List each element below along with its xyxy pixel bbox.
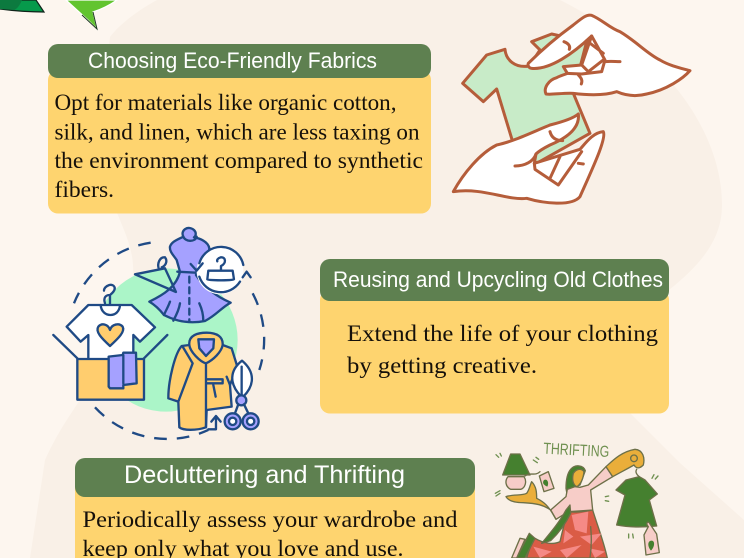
hanger refresh circle [191,247,251,294]
green shirt on hanger with tag [616,469,659,555]
lamp with tag [503,454,554,492]
woman figure [506,449,644,558]
text block: reusing description: Extend the life of your clothing [347,321,659,346]
text block: reusing description [347,321,659,378]
text block: decluttering description: Periodically assess your wardrobe and [82,507,458,532]
text block: fabrics description: silk, and linen, which are less taxing on [54,120,420,144]
text block: fabrics description: the environment compared to synthetic [54,148,423,173]
t-shirt and box [53,285,167,400]
illustration: thrifting woman [495,441,659,558]
illustration: reuse and upcycle clothes [53,228,264,439]
text block: reusing description: by getting creative. [347,353,537,378]
text block: fabrics description: Opt for materials like organic cotton, [54,90,396,115]
panel: decluttering and thrifting [75,458,475,558]
green circle [94,268,238,412]
coat [168,333,237,430]
motion marks [495,453,658,538]
decorative leaves [0,0,117,29]
illustration: hands holding a green t-shirt [453,15,690,203]
panel: reusing and upcycling old clothes [320,259,669,414]
label: thrifting lettering: THRIFTING [543,441,610,461]
heading: reusing and upcycling: Reusing and Upcycling Old Clothes [333,267,663,292]
dashed cycle ring [74,243,264,439]
scissors [208,361,259,429]
panel: choosing eco-friendly fabrics [48,44,431,214]
dress on mannequin with hanger [135,228,231,322]
text block: decluttering description [82,507,458,558]
heading: decluttering and thrifting: Decluttering and Thrifting [124,461,405,489]
text block: fabrics description [54,90,423,202]
text block: fabrics description: fibers. [54,177,114,202]
heading: choosing eco-friendly fabrics: Choosing Eco-Friendly Fabrics [88,48,377,73]
